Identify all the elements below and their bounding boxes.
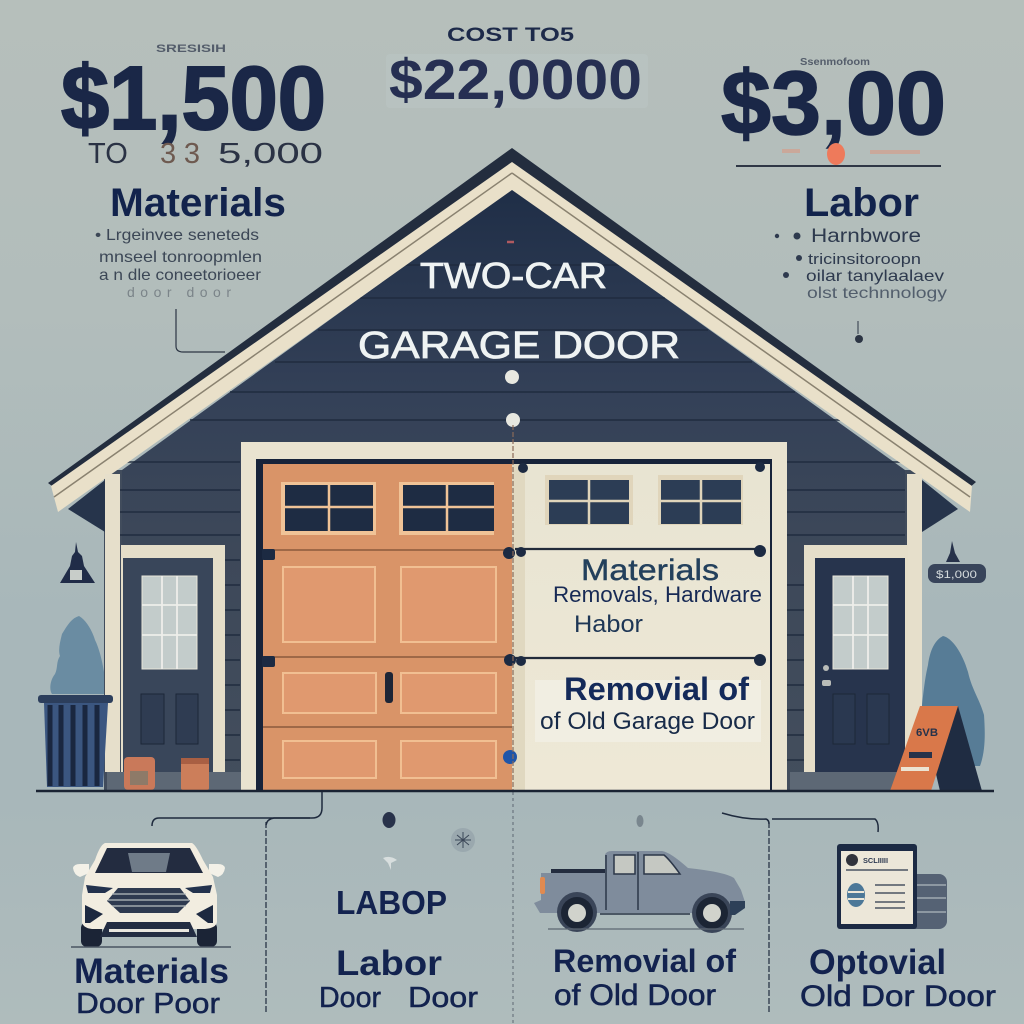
lower bumper	[100, 922, 197, 937]
left connector	[152, 792, 322, 826]
back binder	[905, 874, 947, 929]
caption removal: of Old Door	[554, 979, 716, 1012]
labor notes: tricinsitoroopn	[808, 251, 921, 268]
roof dark outline	[48, 148, 976, 489]
divider	[736, 165, 941, 167]
leader line materials	[176, 309, 225, 352]
grille	[107, 888, 190, 913]
price $1,500: $1,500	[61, 49, 326, 149]
taillight	[540, 877, 545, 894]
caption labor	[319, 884, 478, 1014]
door window	[142, 576, 197, 669]
caption materials door: Door Poor	[76, 988, 220, 1020]
highlight behind price	[386, 54, 648, 108]
labor notes: olst technnology	[807, 285, 947, 302]
panel: labor price	[721, 54, 947, 343]
caption removal: Removial of	[553, 943, 736, 979]
right door half	[512, 464, 770, 790]
materials notes	[95, 227, 262, 300]
left eave shadow	[68, 480, 105, 532]
heading materials: Materials	[110, 181, 286, 225]
right door text habor: Habor	[574, 611, 643, 638]
panel: total cost	[386, 25, 648, 112]
cab windows	[614, 855, 680, 874]
door window	[833, 576, 888, 669]
door handle	[385, 672, 393, 703]
hinges	[262, 462, 766, 667]
heading labor: Labor	[804, 181, 919, 225]
truck bed rail	[551, 869, 605, 873]
mirrors	[73, 864, 225, 877]
faint marks	[782, 151, 920, 152]
house	[48, 148, 976, 790]
left corner trim	[105, 474, 120, 772]
fog lamps	[85, 905, 213, 923]
roof fascia	[51, 162, 972, 512]
small caption labor: Ssenmofoom	[800, 57, 870, 68]
door frame	[804, 545, 908, 773]
materials notes: mnseel tonroopmlen	[99, 249, 262, 266]
caption removal	[553, 943, 736, 1012]
caption labor: Door	[408, 982, 478, 1014]
avatar	[846, 854, 858, 866]
right door shade edge	[512, 464, 525, 790]
right door seams	[515, 549, 760, 658]
sheet title: SCLIIIII	[863, 858, 888, 865]
caption materials door: Materials	[74, 952, 229, 991]
materials notes: door door	[127, 284, 231, 300]
price $22,0000: $22,0000	[389, 48, 642, 112]
pickup truck icon	[534, 851, 745, 933]
bumper	[730, 901, 745, 915]
pin labor bottom	[382, 812, 396, 828]
dashed divider left	[265, 822, 267, 1014]
cost caption: COST TO5	[447, 25, 575, 46]
trash can	[38, 695, 113, 787]
price range to: TO	[88, 138, 128, 170]
right door text removal hardware: Removals, Hardware	[553, 582, 762, 607]
sheet lines	[846, 870, 908, 908]
sheet	[837, 844, 917, 929]
left entry door	[107, 545, 241, 791]
left door half	[263, 464, 512, 790]
center dashed line	[512, 425, 514, 790]
blue roller	[503, 750, 517, 764]
caption optional	[800, 943, 996, 1013]
caption optional: Old Dor Door	[800, 980, 996, 1013]
step	[790, 772, 910, 791]
caption labor: Labor	[336, 944, 442, 983]
orange sandwich sign	[890, 706, 982, 791]
price range to: 33	[160, 138, 200, 170]
wheel arches	[557, 892, 597, 932]
caption labor: Door	[319, 982, 381, 1014]
left shrub	[50, 616, 104, 694]
door handle	[822, 665, 831, 686]
body	[82, 843, 217, 929]
windshield	[95, 848, 203, 873]
small caption materials: SRESISIH	[156, 43, 226, 55]
left door seams	[263, 550, 512, 727]
right door text old garage door: of Old Garage Door	[540, 708, 755, 735]
left door windows	[281, 482, 494, 535]
right shrub	[922, 636, 985, 766]
headlights	[86, 885, 212, 893]
price range to: 5,000	[218, 138, 323, 170]
right eave shadow	[922, 480, 958, 532]
right door text backing	[535, 680, 761, 742]
left lamp	[60, 542, 95, 583]
connector lines	[152, 792, 878, 1014]
labor notes: Harnbwore	[811, 226, 921, 247]
document icon	[837, 844, 947, 929]
caption labor: LABOP	[336, 884, 447, 921]
orange dot marker	[827, 143, 845, 165]
materials notes: • Lrgeinvee seneteds	[95, 227, 259, 244]
caption optional: Optovial	[809, 943, 946, 982]
gable wall	[122, 188, 905, 790]
right lamp and tag: $1,000	[936, 569, 977, 581]
garage inner shadow	[256, 459, 772, 791]
step	[107, 772, 241, 791]
labor notes: oilar tanylaalaev	[806, 268, 944, 285]
left door panels	[283, 567, 496, 778]
price range to	[88, 138, 323, 170]
title garage door: GARAGE DOOR	[358, 325, 680, 367]
price tag	[928, 564, 986, 583]
center dashed line lower	[512, 792, 514, 1024]
gable pink mark	[507, 241, 514, 243]
door frame	[121, 545, 225, 773]
wheels	[81, 922, 102, 947]
right door text materials: Materials	[581, 554, 719, 587]
door	[123, 558, 213, 773]
pins center	[505, 370, 520, 427]
right lamp and tag	[928, 541, 986, 583]
ground line	[36, 790, 994, 792]
title two-car: TWO-CAR	[420, 255, 607, 296]
price $3,00: $3,00	[721, 54, 946, 154]
round badge	[451, 828, 475, 852]
right corner trim	[907, 474, 922, 772]
labor notes	[775, 226, 947, 302]
leader pin labor	[855, 321, 863, 343]
panel: materials price	[61, 43, 326, 352]
side walls	[104, 470, 920, 790]
labor icon	[383, 857, 397, 870]
caption materials door	[74, 952, 229, 1020]
pin removal bottom	[636, 815, 644, 827]
garage door	[241, 425, 787, 791]
truck body	[534, 851, 745, 913]
orange sandwich sign: 6VB	[916, 727, 938, 739]
cab seams	[600, 852, 690, 914]
materials notes: a n dle coneetorioeer	[99, 267, 262, 284]
emblem	[847, 883, 865, 907]
right connector	[722, 813, 878, 832]
car icon	[71, 843, 231, 947]
door panels	[141, 694, 198, 744]
dashed divider right	[768, 822, 770, 1014]
right door text removial of: Removial of	[564, 671, 749, 707]
wheels	[561, 897, 728, 929]
siding	[120, 265, 905, 760]
door panels	[833, 694, 889, 744]
right door windows	[545, 475, 743, 525]
paint cans	[124, 757, 209, 790]
right entry door	[790, 545, 910, 791]
garage frame	[241, 442, 787, 791]
door	[815, 558, 905, 773]
